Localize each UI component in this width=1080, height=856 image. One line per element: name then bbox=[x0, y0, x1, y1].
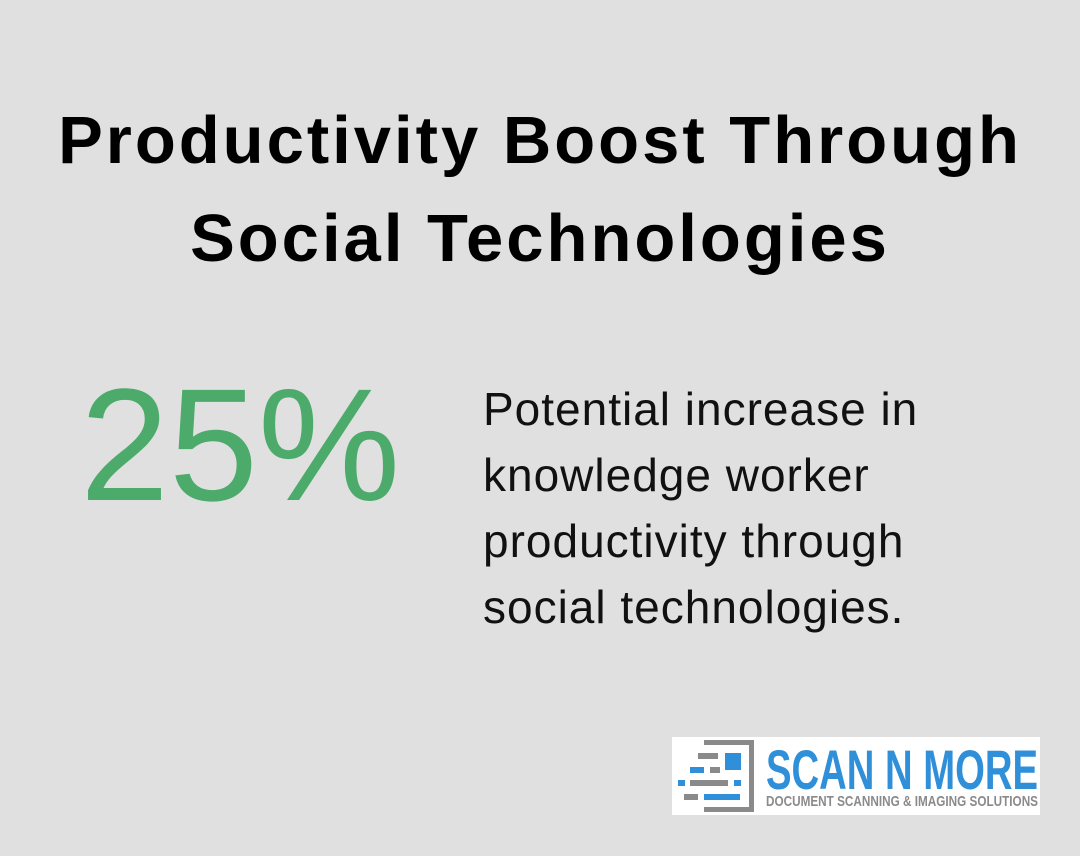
title: Social Technologies bbox=[190, 201, 890, 276]
stat description: productivity through bbox=[483, 515, 904, 567]
stat description: social technologies. bbox=[483, 581, 904, 633]
title: Productivity Boost Through bbox=[58, 103, 1022, 178]
stat number: 25% bbox=[80, 355, 400, 534]
stat description: knowledge worker bbox=[483, 449, 870, 501]
logo bbox=[672, 737, 1040, 815]
title bbox=[58, 103, 1022, 276]
stat description bbox=[483, 383, 918, 633]
icon: scan bbox=[678, 740, 754, 812]
stat description: Potential increase in bbox=[483, 383, 918, 435]
